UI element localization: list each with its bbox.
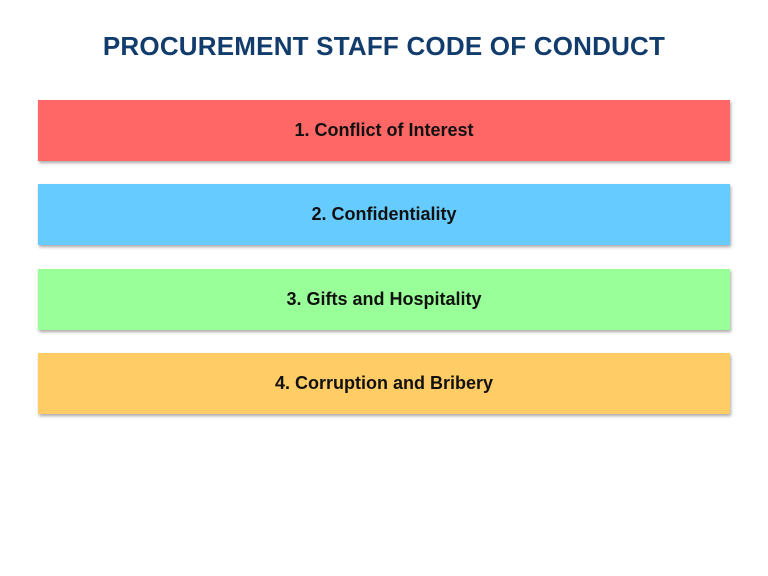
- panel: confidentiality: [38, 184, 730, 245]
- panel: conflict of interest: 1. Conflict of Interest: [294, 120, 474, 140]
- panel: corruption and bribery: 4. Corruption and Bribery: [275, 373, 493, 393]
- panel: confidentiality: 2. Confidentiality: [311, 204, 456, 224]
- panel: gifts and hospitality: [38, 269, 730, 330]
- title: PROCUREMENT STAFF CODE OF CONDUCT: [103, 31, 665, 61]
- panel: corruption and bribery: [38, 353, 730, 414]
- panel: gifts and hospitality: 3. Gifts and Hospitality: [286, 289, 482, 309]
- panel: conflict of interest: [38, 100, 730, 161]
